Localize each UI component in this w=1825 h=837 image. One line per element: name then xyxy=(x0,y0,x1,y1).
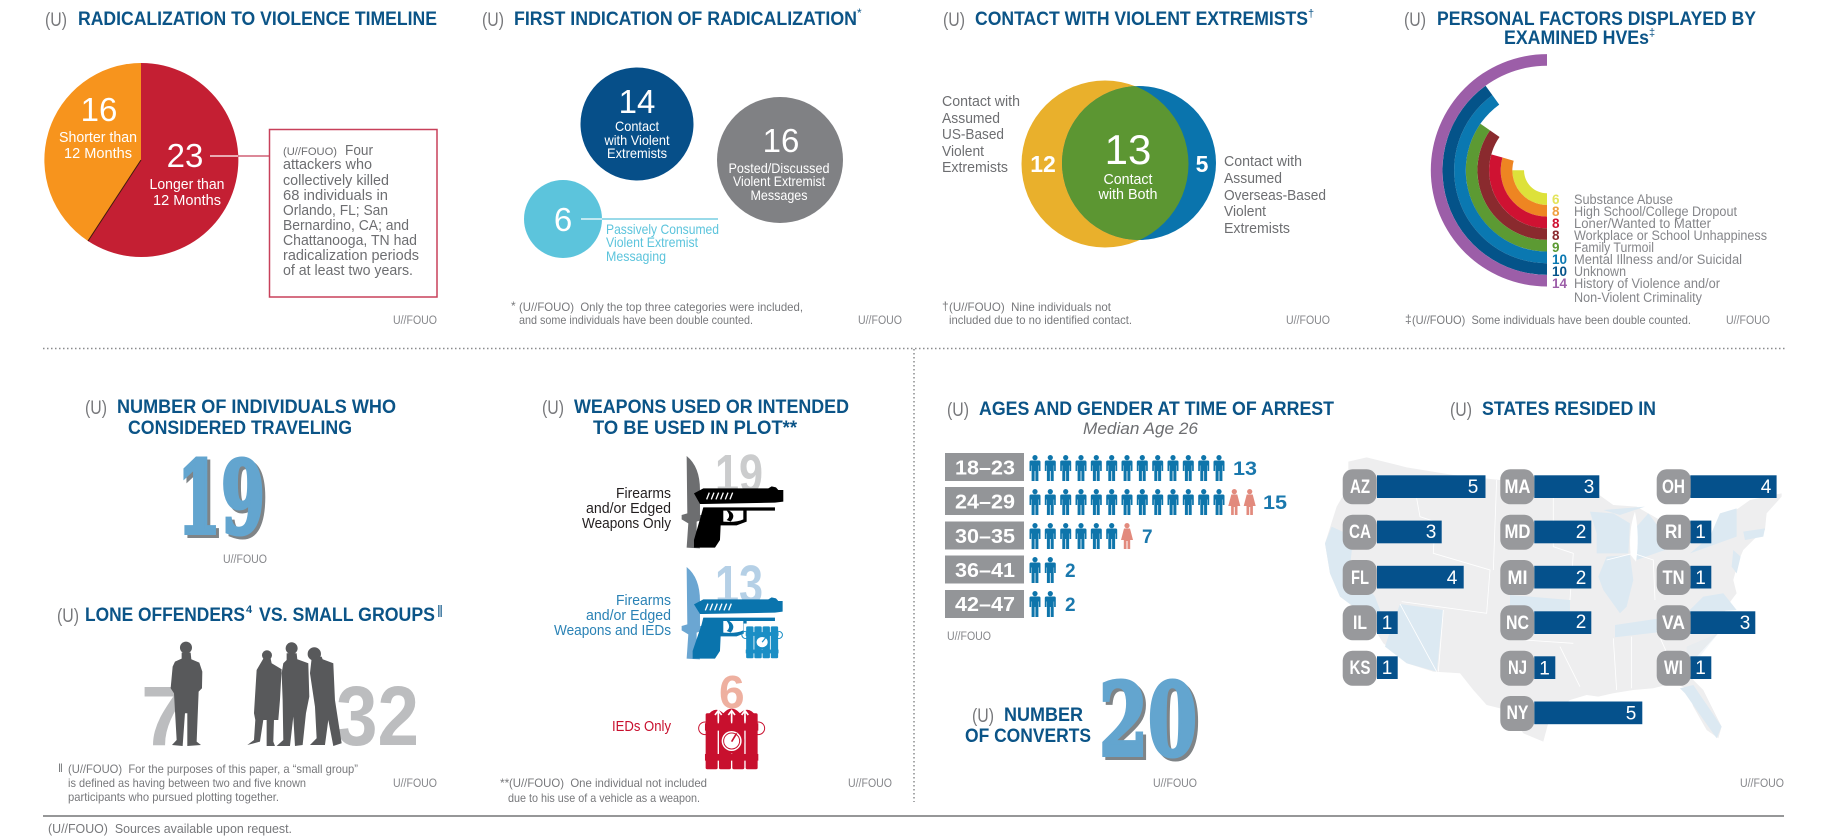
row: ages 42-47: 2 xyxy=(1065,595,1076,616)
footnote: top three categories: and some individuals have been double counted. xyxy=(519,313,753,327)
label: overseas-based contacts xyxy=(1224,153,1326,237)
bars: state counts column 1: 1 xyxy=(1382,613,1392,634)
legend: personal factor counts: 8 xyxy=(1552,204,1560,219)
bubble: passively consumed messaging: Messaging xyxy=(606,248,666,264)
row: ages 24-29 xyxy=(945,487,1287,515)
label: US-based contacts: Assumed xyxy=(942,110,1000,127)
source mark: U//FOUO xyxy=(1153,778,1197,790)
footnote: double counted: ‡ xyxy=(1405,312,1412,326)
panel: contact with violent extremists xyxy=(942,8,1330,327)
pie chart: 12 Months xyxy=(64,145,132,162)
bubble: passively consumed messaging: Violent Extremist xyxy=(606,234,698,250)
callout: attackers with long radicalization: Chattanooga, TN had xyxy=(283,232,417,249)
bubble: contact with violent extremists: with Violent xyxy=(604,132,670,148)
bars: state counts column 3: WI xyxy=(1664,658,1683,679)
heading: number of converts: (U) xyxy=(972,706,994,727)
footnote: no identified contact: † xyxy=(942,299,949,313)
big number: 20: 20 xyxy=(1099,661,1197,779)
source mark: U//FOUO xyxy=(393,315,437,327)
pie chart: 23 xyxy=(167,137,203,174)
bars: state counts column 1: 4 xyxy=(1447,568,1458,589)
heading: ages and gender: Median Age 26 xyxy=(1083,419,1199,438)
heading: weapons xyxy=(542,396,849,439)
bars: state counts column 1: 3 xyxy=(1426,522,1436,543)
callout: attackers with long radicalization: Four xyxy=(345,142,373,159)
pie chart: 12 Months xyxy=(153,192,221,209)
bars: state counts column 1: CA xyxy=(1349,522,1371,543)
panel: lone offenders vs small groups xyxy=(57,602,443,804)
row: firearms, edged weapons and IEDs: 13 xyxy=(715,555,763,615)
legend: personal factor counts: 6 xyxy=(1552,192,1560,207)
source mark: U//FOUO xyxy=(858,315,902,327)
bars: state counts column 2: NY xyxy=(1506,703,1529,724)
callout: attackers with long radicalization xyxy=(238,130,437,297)
callout: attackers with long radicalization: of at least two years. xyxy=(283,262,413,279)
heading: lone offenders: ‖ xyxy=(437,602,443,621)
callout: attackers with long radicalization: Bernardino, CA; and xyxy=(283,217,409,234)
row: ages 42-47 xyxy=(945,590,1076,618)
bars: state counts column 3: 1 xyxy=(1695,658,1706,679)
row: firearms and edged weapons only xyxy=(582,444,783,548)
footnote: no identified contact xyxy=(942,299,1132,327)
bars: state counts column 1 xyxy=(1343,469,1486,686)
footnote: small group definition: (U//FOUO) For the purposes of this paper, a “small group” xyxy=(68,762,358,776)
bars: state counts column 2: NJ xyxy=(1508,658,1527,679)
bars: state counts column 2: 1 xyxy=(1539,658,1550,680)
row: IEDs only: IEDs Only xyxy=(612,718,671,735)
footnote: small group definition: is defined as having between two and five known xyxy=(68,776,306,790)
bars: state counts column 2: 2 xyxy=(1576,568,1586,589)
bubble: contact with violent extremists xyxy=(580,68,694,180)
heading: weapons: WEAPONS USED OR INTENDED xyxy=(574,396,849,418)
label: overseas-based contacts: Extremists xyxy=(1224,220,1290,237)
bars: state counts column 2: MI xyxy=(1508,568,1528,589)
label: US-based contacts: Violent xyxy=(942,143,985,160)
row: ages 24-29: 15 xyxy=(1263,493,1287,514)
big number: 20: 20 xyxy=(1102,664,1200,782)
label: US-based contacts: Contact with xyxy=(942,93,1020,110)
heading: ages and gender: AGES AND GENDER AT TIME OF ARREST xyxy=(979,398,1334,420)
bars: state counts column 3: 3 xyxy=(1740,613,1750,634)
pie chart xyxy=(44,63,238,257)
heading: personal factors: (U) xyxy=(1404,10,1426,31)
legend: personal factor counts: Mental Illness and/or Suicidal xyxy=(1574,252,1742,267)
legend: personal factor counts xyxy=(1552,192,1767,305)
big number: 7 lone offenders: 7 xyxy=(141,669,188,763)
heading: contact with violent extremists: (U) xyxy=(943,10,965,31)
row: firearms and edged weapons only: 19 xyxy=(715,444,763,504)
row: firearms and edged weapons only: and/or Edged xyxy=(586,500,671,517)
heading: first indication: * xyxy=(857,6,862,20)
heading: states resided in: STATES RESIDED IN xyxy=(1482,398,1656,420)
row: ages 36-41 xyxy=(945,556,1076,584)
footnote: top three categories xyxy=(511,299,803,327)
bubble: posted or discussed messages: Messages xyxy=(750,187,808,203)
bars: state counts column 2: MA xyxy=(1504,477,1531,498)
heading: lone offenders: VS. SMALL GROUPS xyxy=(259,604,435,626)
heading: personal factors xyxy=(1404,8,1756,49)
row: ages 30-35: 30–35 xyxy=(955,526,1015,548)
legend: personal factor counts: Workplace or School Unhappiness xyxy=(1574,228,1767,243)
heading: radicalization timeline: RADICALIZATION TO VIOLENCE TIMELINE xyxy=(78,8,437,30)
venn diagram: with Both xyxy=(1098,186,1158,203)
legend: personal factor counts: 8 xyxy=(1552,216,1560,231)
footnote: double counted: (U//FOUO) Some individuals have been double counted. xyxy=(1412,313,1691,327)
bubble: posted or discussed messages xyxy=(717,97,843,223)
label: overseas-based contacts: Assumed xyxy=(1224,170,1282,187)
icon: lone silhouette xyxy=(171,642,202,746)
footnote: vehicle excluded: due to his use of a vehicle as a weapon. xyxy=(508,791,700,805)
bubble: posted or discussed messages: Posted/Discussed xyxy=(728,160,830,176)
bars: state counts column 3: TN xyxy=(1662,568,1684,589)
legend: personal factor counts: Loner/Wanted to Matter xyxy=(1574,216,1711,231)
row: ages 42-47: 42–47 xyxy=(955,594,1015,616)
heading: considered traveling: NUMBER OF INDIVIDUALS WHO xyxy=(117,396,396,418)
bubble: posted or discussed messages: 16 xyxy=(763,122,799,159)
label: overseas-based contacts: Overseas-Based xyxy=(1224,187,1326,204)
heading: radicalization timeline: (U) xyxy=(45,10,67,31)
footnote: no identified contact: (U//FOUO) Nine individuals not xyxy=(949,300,1112,314)
heading: personal factors: PERSONAL FACTORS DISPLAYED BY xyxy=(1437,8,1756,30)
heading: lone offenders: 4 xyxy=(246,604,253,616)
big number: 19: 19 xyxy=(180,442,268,560)
heading: number of converts xyxy=(965,704,1091,747)
bubble: passively consumed messaging xyxy=(524,180,719,264)
label: US-based contacts: Extremists xyxy=(942,159,1008,176)
panel: considered traveling xyxy=(85,396,396,566)
panel: states resided in xyxy=(1325,398,1784,790)
callout: attackers with long radicalization: attackers who xyxy=(283,156,372,173)
bars: state counts column 3: 1 xyxy=(1695,522,1706,543)
bars: state counts column 1: 1 xyxy=(1382,658,1392,679)
bubble: posted or discussed messages: Violent Extremist xyxy=(733,173,825,189)
venn diagram xyxy=(1022,80,1216,248)
source mark: U//FOUO xyxy=(1726,315,1770,327)
venn diagram: 5 xyxy=(1196,151,1209,177)
bubble: contact with violent extremists: 14 xyxy=(619,83,655,120)
heading: number of converts: NUMBER xyxy=(1004,704,1083,726)
bubble: contact with violent extremists: Contact xyxy=(615,118,659,134)
heading: weapons: TO BE USED IN PLOT** xyxy=(593,417,797,439)
bars: state counts column 1: KS xyxy=(1350,658,1370,679)
row: firearms, edged weapons and IEDs: and/or Edged xyxy=(586,607,671,624)
heading: contact with violent extremists: † xyxy=(1308,8,1314,20)
bars: state counts column 3: OH xyxy=(1662,477,1685,498)
heading: considered traveling: (U) xyxy=(85,398,107,419)
big number: 19 xyxy=(177,439,268,560)
footnote: top three categories: * xyxy=(511,299,516,313)
heading: contact with violent extremists: CONTACT WITH VIOLENT EXTREMISTS xyxy=(975,8,1308,30)
heading: lone offenders: LONE OFFENDERS xyxy=(85,604,245,626)
heading: considered traveling xyxy=(85,396,396,439)
bars: state counts column 2: NC xyxy=(1506,613,1529,634)
legend: personal factor counts: 9 xyxy=(1552,240,1560,255)
bars: state counts column 2 xyxy=(1500,469,1642,731)
row: ages 30-35 xyxy=(945,522,1153,550)
callout: attackers with long radicalization: collectively killed xyxy=(283,172,389,189)
bars: state counts column 3: 4 xyxy=(1761,477,1772,498)
legend: personal factor counts: Substance Abuse xyxy=(1574,192,1673,207)
pie chart: 16 xyxy=(81,91,117,128)
bars: state counts column 1: IL xyxy=(1353,613,1367,634)
row: ages 36-41: 36–41 xyxy=(955,560,1015,582)
bars: state counts column 3: 1 xyxy=(1695,568,1706,589)
label: US-based contacts xyxy=(942,93,1020,176)
label: overseas-based contacts: Violent xyxy=(1224,203,1267,220)
heading: ages and gender xyxy=(947,398,1334,438)
bars: state counts column 2: 5 xyxy=(1626,704,1636,724)
row: ages 18-23 xyxy=(945,453,1257,481)
legend: personal factor counts: 8 xyxy=(1552,228,1560,243)
row: firearms, edged weapons and IEDs: Firearms xyxy=(616,592,671,609)
bars: state counts column 1: AZ xyxy=(1350,477,1370,498)
venn diagram: 13 xyxy=(1105,126,1151,173)
heading: considered traveling: CONSIDERED TRAVELING xyxy=(128,417,352,439)
row: ages 18-23: 18–23 xyxy=(955,458,1015,480)
panel: ages and gender xyxy=(945,398,1334,643)
pie chart: Longer than xyxy=(150,176,224,193)
bubble: passively consumed messaging: Passively Consumed xyxy=(606,221,719,237)
legend: personal factor counts: 10 xyxy=(1552,252,1567,267)
venn diagram: 12 xyxy=(1030,151,1056,177)
radial bar chart xyxy=(1431,54,1547,286)
callout: attackers with long radicalization: radicalization periods xyxy=(283,247,419,264)
heading: states resided in: (U) xyxy=(1450,400,1472,421)
source mark: U//FOUO xyxy=(848,778,892,790)
bars: state counts column 2: 2 xyxy=(1576,612,1586,633)
source mark: U//FOUO xyxy=(1740,778,1784,790)
panel: number of converts xyxy=(965,661,1200,790)
bars: state counts column 2: MD xyxy=(1504,522,1530,543)
bubble: contact with violent extremists: Extremists xyxy=(607,145,667,161)
heading: first indication: FIRST INDICATION OF RADICALIZATION xyxy=(514,8,857,30)
row: IEDs only: 6 xyxy=(719,666,745,718)
bars: state counts column 2: 3 xyxy=(1584,477,1594,498)
label: US-based contacts: US-Based xyxy=(942,126,1004,143)
venn diagram: Contact xyxy=(1104,171,1153,188)
legend: personal factor counts: Unknown xyxy=(1574,264,1626,279)
icon: group silhouette xyxy=(247,642,342,746)
row: firearms and edged weapons only: Weapons Only xyxy=(582,515,671,532)
row: ages 36-41: 2 xyxy=(1065,561,1076,582)
heading: personal factors: ‡ xyxy=(1649,27,1655,39)
footnote: no identified contact: included due to no identified contact. xyxy=(949,313,1132,327)
heading: first indication: (U) xyxy=(482,10,504,31)
row: ages 30-35: 7 xyxy=(1142,527,1153,548)
row: firearms, edged weapons and IEDs xyxy=(554,555,783,660)
footnote: small group definition: ‖ xyxy=(58,761,63,775)
map: United States xyxy=(1325,457,1782,742)
bars: state counts column 2: 2 xyxy=(1576,522,1586,543)
big number: 19: 19 xyxy=(177,439,265,557)
footnote: vehicle excluded: (U//FOUO) One individual not included xyxy=(509,776,707,790)
source mark: U//FOUO xyxy=(947,631,991,643)
heading: ages and gender: (U) xyxy=(947,400,969,421)
bars: state counts column 3: RI xyxy=(1665,522,1682,543)
source mark: U//FOUO xyxy=(1286,315,1330,327)
row: ages 18-23: 13 xyxy=(1233,459,1257,480)
panel: personal factors xyxy=(1404,8,1770,327)
footnote: vehicle excluded xyxy=(500,776,707,805)
legend: personal factor counts: High School/College Dropout xyxy=(1574,204,1737,219)
heading: lone offenders: (U) xyxy=(57,606,79,627)
legend: personal factor counts: Non-Violent Criminality xyxy=(1574,290,1702,305)
footnote: small group definition: participants who pursued plotting together. xyxy=(68,790,279,804)
label: overseas-based contacts: Contact with xyxy=(1224,153,1302,170)
panel: radicalization to violence timeline xyxy=(44,8,437,327)
bars: state counts column 1: FL xyxy=(1351,568,1369,589)
callout: attackers with long radicalization: Orlando, FL; San xyxy=(283,202,388,219)
bars: state counts column 1: 5 xyxy=(1468,477,1478,498)
pie chart: Shorter than xyxy=(59,129,137,146)
footnote: top three categories: (U//FOUO) Only the top three categories were included, xyxy=(519,300,803,314)
callout: attackers with long radicalization: 68 individuals in xyxy=(283,187,388,204)
heading: weapons: (U) xyxy=(542,398,564,419)
heading: personal factors: EXAMINED HVEs xyxy=(1504,27,1649,49)
big number: 32 in small groups: 32 xyxy=(336,669,419,763)
footnote: vehicle excluded: ** xyxy=(500,776,510,790)
panel: first indication of radicalization xyxy=(482,6,902,327)
bars: state counts column 3 xyxy=(1657,469,1777,686)
footnote: small group definition xyxy=(58,761,358,804)
row: firearms, edged weapons and IEDs: Weapons and IEDs xyxy=(554,622,671,639)
panel: weapons used xyxy=(500,396,892,805)
legend: personal factor counts: 10 xyxy=(1552,264,1567,279)
bars: state counts column 3: VA xyxy=(1662,613,1685,634)
bubble: passively consumed messaging: 6 xyxy=(554,201,572,238)
footer: sources note: (U//FOUO) Sources available upon request. xyxy=(48,821,292,836)
legend: personal factor counts: 14 xyxy=(1552,276,1568,291)
row: firearms and edged weapons only: Firearms xyxy=(616,485,671,502)
legend: personal factor counts: History of Violence and/or xyxy=(1574,276,1720,291)
row: IEDs only xyxy=(612,666,765,769)
heading: number of converts: OF CONVERTS xyxy=(965,725,1091,747)
callout: attackers with long radicalization: (U//FOUO) xyxy=(283,146,337,158)
source mark: U//FOUO xyxy=(393,778,437,790)
row: ages 24-29: 24–29 xyxy=(955,492,1015,514)
legend: personal factor counts: Family Turmoil xyxy=(1574,240,1654,255)
heading: lone offenders xyxy=(57,602,443,627)
source mark: U//FOUO xyxy=(223,554,267,566)
